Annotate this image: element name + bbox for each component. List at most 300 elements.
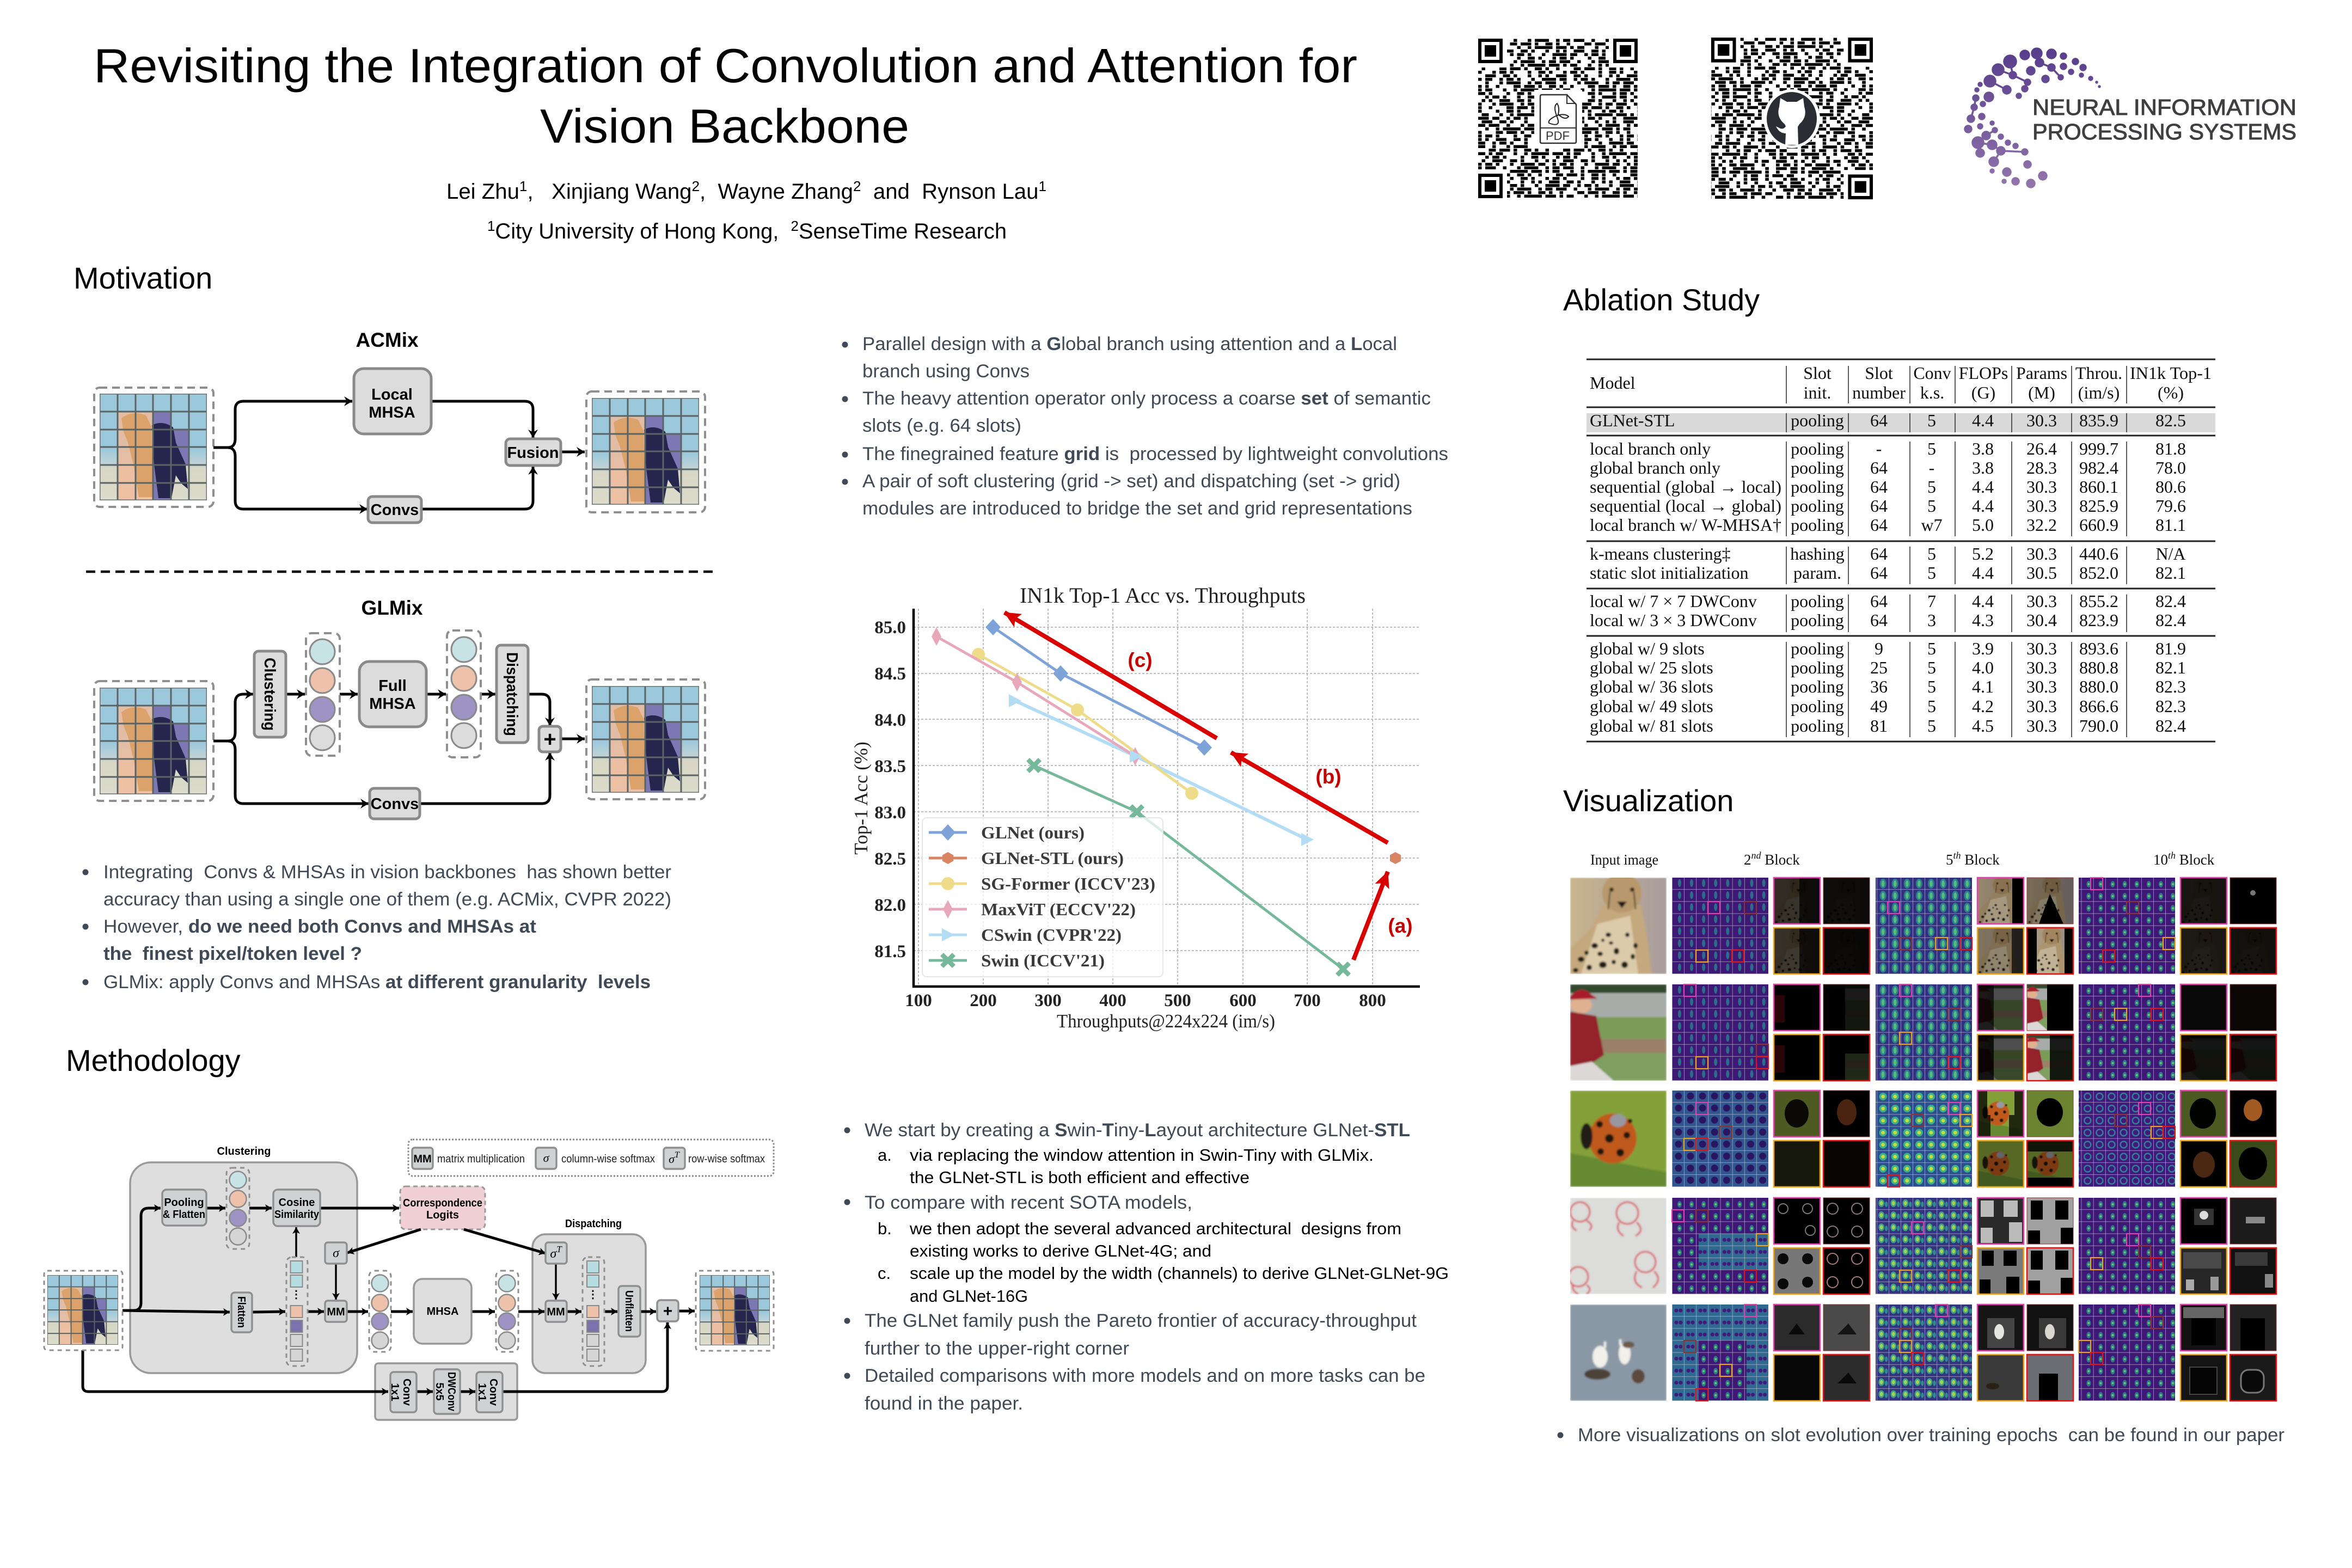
table header: (G) — [1971, 383, 1995, 402]
rows: conv kernel size: 3 — [1927, 610, 1936, 630]
CSwin marker — [1130, 750, 1142, 763]
rows: slot initialization: 30.3 — [2026, 544, 2057, 564]
panel: dispatching — [532, 1234, 646, 1373]
legend: MaxViT (ECCV'22) — [981, 899, 1136, 919]
rows: slot number: 5 — [1927, 696, 1936, 716]
row: cartoon cloth — [1569, 1198, 2276, 1294]
ACMix heading: ACMix — [356, 329, 419, 351]
rows: conv kernel size: 64 — [1870, 591, 1888, 611]
arrow: (a) — [1353, 872, 1388, 960]
rows: branch variants: 660.9 — [2079, 515, 2118, 535]
rows: conv kernel size: 64 — [1870, 610, 1888, 630]
text block: method description: existing works to derive GLNet-4G; and — [910, 1241, 1211, 1260]
text block: GLMix description: slots (e.g. 64 slots) — [862, 415, 1021, 436]
rows: branch variants: 5 — [1927, 439, 1936, 458]
rows: slot number: 4.0 — [1972, 658, 1994, 677]
sigma T — [546, 1242, 567, 1264]
rows: branch variants: 81.8 — [2155, 439, 2186, 458]
text block: method description: we then adopt the several advanced architectural designs from — [909, 1219, 1401, 1238]
series: MaxViT — [932, 627, 1140, 765]
rows: conv kernel size: local w/ 3 × 3 DWConv — [1590, 610, 1757, 630]
Conv 1x1: 1x1 — [389, 1383, 401, 1401]
Conv 1x1 — [476, 1372, 503, 1412]
row: GLNet-STL — [1590, 411, 2186, 430]
Local MHSA box: MHSA — [369, 404, 415, 421]
x tick labels: 600 — [1229, 991, 1257, 1010]
rows: slot initialization: N/A — [2155, 544, 2186, 564]
rows: slot number: 790.0 — [2079, 716, 2118, 736]
text block: method description: c. — [878, 1264, 891, 1283]
text block: method description: found in the paper. — [865, 1393, 1023, 1414]
y tick labels: 82.0 — [874, 896, 906, 915]
DWConv 5x5 — [433, 1369, 460, 1414]
rows: slot initialization: hashing — [1790, 544, 1845, 564]
y tick labels — [874, 618, 906, 961]
heading: Methodology: Methodology — [66, 1043, 241, 1077]
column headers: Block — [1761, 852, 1800, 868]
Fusion box: Fusion — [507, 444, 559, 462]
x tick labels — [905, 991, 1386, 1010]
rows: slot number: 30.3 — [2026, 639, 2057, 658]
authors: 2 — [692, 178, 700, 194]
rows: branch variants: - — [1876, 439, 1882, 458]
rows: branch variants: 79.6 — [2155, 496, 2186, 516]
rows: branch variants: 64 — [1870, 477, 1888, 497]
table header: Model — [1590, 373, 1636, 393]
text block: motivation bullets: Integrating Convs & MHSAs in vision backbones has shown better — [103, 862, 671, 883]
Conv 1x1 — [389, 1372, 416, 1412]
Correspondence Logits — [400, 1186, 485, 1229]
rows: slot number: 5 — [1927, 677, 1936, 696]
legend: T — [675, 1150, 680, 1160]
row: GLNet-STL: pooling — [1791, 411, 1844, 430]
rows: branch variants: 64 — [1870, 496, 1888, 516]
table: ablation study — [1587, 359, 2215, 742]
arrows — [83, 1208, 695, 1392]
rows: branch variants: 80.6 — [2155, 477, 2186, 497]
Convs box: Convs — [371, 795, 419, 813]
plus box — [539, 726, 561, 752]
Pooling & Flatten: & Flatten — [163, 1209, 205, 1221]
rows: conv kernel size: 30.4 — [2026, 610, 2057, 630]
row: GLNet-STL: 5 — [1927, 411, 1936, 430]
plus — [657, 1300, 678, 1321]
table header: IN1k Top-1 — [2130, 363, 2212, 383]
rows: slot number: 866.6 — [2079, 696, 2118, 716]
table header: Slot — [1803, 363, 1832, 383]
table header: Slot — [1865, 363, 1893, 383]
rows: branch variants: pooling — [1791, 439, 1844, 458]
rows: conv kernel size: pooling — [1791, 610, 1844, 630]
series: GLNet — [985, 619, 1212, 756]
table header: (%) — [2158, 383, 2184, 402]
panel: local branch — [375, 1363, 517, 1420]
Unflatten — [618, 1286, 640, 1337]
Dispatching label: Dispatching — [565, 1218, 622, 1230]
title: Vision Backbone — [540, 99, 909, 153]
rows: conv kernel size — [1590, 591, 2186, 630]
rows: branch variants: 3.8 — [1972, 458, 1994, 477]
rows: branch variants: 64 — [1870, 515, 1888, 535]
Clustering label: Clustering — [217, 1146, 271, 1157]
rows: slot number: 893.6 — [2079, 639, 2118, 658]
text block: method description: b. — [878, 1219, 892, 1238]
text block: GLMix description: The heavy attention operator only process a coarse set of semantic — [862, 388, 1431, 409]
rows: slot initialization: 64 — [1870, 563, 1888, 583]
authors: and Rynson Lau — [861, 180, 1038, 204]
rows: slot number: 30.3 — [2026, 677, 2057, 696]
y tick labels: 85.0 — [874, 618, 906, 638]
rows: slot number: 49 — [1870, 696, 1888, 716]
MHSA: MHSA — [427, 1306, 458, 1318]
input image — [44, 1271, 122, 1350]
rows: slot number: 880.8 — [2079, 658, 2118, 677]
MM — [325, 1301, 347, 1322]
chart: accuracy vs throughput — [850, 583, 1420, 1032]
logo wordmark: NEURAL INFORMATION — [2032, 95, 2296, 120]
axes — [914, 609, 1420, 987]
text block: method description: via replacing the window attention in Swin-Tiny with GLMix. — [910, 1146, 1374, 1165]
rows: branch variants: 4.4 — [1972, 477, 1994, 497]
output image — [696, 1271, 774, 1351]
Pooling & Flatten — [162, 1190, 206, 1226]
table header: Conv — [1913, 363, 1951, 383]
Unflatten: Unflatten — [623, 1290, 635, 1332]
text block: motivation bullets: GLMix: apply Convs and MHSAs at different granularity levels — [103, 972, 651, 993]
rows: branch variants: pooling — [1791, 496, 1844, 516]
rows: branch variants: 999.7 — [2079, 439, 2118, 458]
rows: conv kernel size: local w/ 7 × 7 DWConv — [1590, 591, 1757, 611]
rows: conv kernel size: 7 — [1927, 591, 1936, 611]
Flatten: Flatten — [235, 1296, 247, 1328]
column headers: 2 — [1744, 852, 1751, 868]
icon: dotted arc — [1965, 48, 2100, 187]
row: cheetah — [1570, 873, 2276, 974]
rows: slot number: 880.0 — [2079, 677, 2118, 696]
rows: slot initialization: 30.5 — [2026, 563, 2057, 583]
rows: slot number: 5 — [1927, 716, 1936, 736]
column headers: Block — [2176, 852, 2215, 868]
panel: ACMix diagram — [94, 329, 705, 523]
rows: slot number: 36 — [1870, 677, 1888, 696]
rows: branch variants: 64 — [1870, 458, 1888, 477]
rows: slot initialization: k-means clustering‡ — [1590, 544, 1731, 564]
rows: slot number: 82.1 — [2155, 658, 2186, 677]
chart title: IN1k Top-1 Acc vs. Throughputs — [1020, 583, 1306, 608]
panel: clustering — [130, 1162, 357, 1373]
rows: branch variants: 982.4 — [2079, 458, 2118, 477]
GLMix heading: GLMix — [361, 597, 423, 619]
MM: MM — [327, 1306, 345, 1318]
rows: slot number: global w/ 9 slots — [1590, 639, 1705, 658]
arrow: (b) — [1231, 752, 1388, 843]
rows: slot number: 9 — [1875, 639, 1883, 658]
rows: branch variants: sequential (global → local) — [1590, 477, 1781, 497]
table header: number — [1852, 383, 1906, 402]
y tick labels: 84.0 — [874, 710, 906, 730]
arrow: (c) — [1004, 612, 1217, 738]
rows: slot number: 82.3 — [2155, 677, 2186, 696]
rows: slot number: global w/ 36 slots — [1590, 677, 1713, 696]
affiliations: 2 — [791, 218, 799, 234]
y tick labels: 82.5 — [874, 849, 906, 869]
arrow labels: (a) — [1388, 915, 1413, 937]
legend: column-wise softmax — [561, 1153, 655, 1165]
Full MHSA box: Full — [378, 677, 407, 695]
row: GLNet-STL: 30.3 — [2026, 411, 2057, 430]
sigma T: T — [556, 1244, 562, 1254]
text block: motivation bullets: accuracy than using a single one of them (e.g. ACMix, CVPR 2022) — [103, 889, 671, 910]
QR code: PDF: PDF — [1546, 129, 1570, 143]
rows: slot number: 30.3 — [2026, 716, 2057, 736]
x tick labels: 800 — [1359, 991, 1386, 1010]
rows: slot initialization — [1590, 544, 2186, 583]
slot set — [447, 630, 481, 757]
rows: slot initialization: param. — [1793, 563, 1841, 583]
table header: Throu. — [2075, 363, 2122, 383]
authors: , Xinjiang Wang — [527, 180, 692, 204]
Pooling & Flatten: Pooling — [164, 1197, 204, 1209]
table header: k.s. — [1920, 383, 1944, 402]
x tick labels: 300 — [1034, 991, 1062, 1010]
text block: GLMix description: Parallel design with a Global branch using attention and a Local — [862, 334, 1397, 354]
column headers: th — [1953, 850, 1961, 861]
authors: 1 — [1038, 178, 1046, 194]
arrow labels: (c) — [1128, 649, 1153, 671]
text block: method description — [844, 1120, 1449, 1414]
table header: Params — [2016, 363, 2067, 383]
x tick labels: 500 — [1164, 991, 1191, 1010]
grid — [914, 609, 1420, 987]
rows: conv kernel size: 855.2 — [2079, 591, 2118, 611]
text block: method description: Detailed comparisons with more models and on more tasks can be — [865, 1365, 1425, 1386]
rows: branch variants: 5 — [1927, 496, 1936, 516]
y tick labels: 81.5 — [874, 942, 906, 961]
column headers: Block — [1961, 852, 2000, 868]
token stack: ⋮ — [587, 1289, 598, 1301]
logo wordmark — [2032, 95, 2296, 144]
rows: slot number: global w/ 49 slots — [1590, 696, 1713, 716]
x tick labels: 400 — [1099, 991, 1126, 1010]
row: GLNet-STL: 64 — [1870, 411, 1888, 430]
affiliations: SenseTime Research — [799, 219, 1007, 243]
authors: 2 — [853, 178, 861, 194]
rows: slot number: 4.2 — [1972, 696, 1994, 716]
Dispatching box — [497, 645, 528, 743]
logo: NeurIPS — [1965, 48, 2296, 187]
Full MHSA box — [359, 661, 426, 727]
column headers: Input image — [1590, 852, 1658, 868]
text block: motivation bullets: However, do we need both Convs and MHSAs at — [103, 916, 536, 937]
Correspondence Logits: Logits — [426, 1209, 459, 1221]
row: ladybug — [1570, 1091, 2276, 1187]
rows: branch variants: 5.0 — [1972, 515, 1994, 535]
rows: branch variants: 4.4 — [1972, 496, 1994, 516]
MHSA — [414, 1279, 471, 1344]
Clustering box — [254, 651, 286, 737]
rows: branch variants: pooling — [1791, 458, 1844, 477]
table header — [1590, 363, 2212, 402]
arrow labels — [1128, 649, 1413, 937]
DWConv 5x5: 5x5 — [433, 1382, 445, 1401]
rows: slot number: pooling — [1791, 658, 1844, 677]
QR code: PDF — [1478, 38, 1638, 199]
rows: conv kernel size: 4.4 — [1972, 591, 1994, 611]
title: Revisiting the Integration of Convolution and Attention for — [94, 39, 1357, 93]
sigma — [325, 1242, 347, 1264]
Conv 1x1: Conv — [487, 1379, 499, 1406]
rows: slot number: 81 — [1870, 716, 1888, 736]
series: Swin — [1026, 758, 1351, 977]
y tick labels: 84.5 — [874, 664, 906, 684]
Correspondence Logits: Correspondence — [403, 1197, 482, 1209]
title — [94, 39, 1357, 153]
rows: conv kernel size: 4.3 — [1972, 610, 1994, 630]
Full MHSA box: MHSA — [369, 695, 416, 713]
heading: Visualization: Visualization — [1563, 783, 1734, 818]
column headers: th — [2168, 850, 2176, 861]
column headers: 5 — [1946, 852, 1953, 868]
heading: Motivation: Motivation — [74, 261, 212, 295]
legend: matrix multiplication — [437, 1153, 525, 1165]
rows: slot number: 30.3 — [2026, 696, 2057, 716]
row: baseball player — [1570, 984, 2276, 1081]
legend: σ — [669, 1152, 675, 1166]
legend: GLNet (ours) — [981, 823, 1085, 842]
rows: slot number: pooling — [1791, 677, 1844, 696]
Flatten — [231, 1293, 252, 1332]
divider — [86, 571, 713, 573]
row: GLNet-STL: GLNet-STL — [1590, 411, 1675, 430]
Local MHSA box — [354, 369, 431, 434]
text block: GLMix description: branch using Convs — [862, 361, 1030, 382]
MM: MM — [547, 1306, 565, 1318]
rows: conv kernel size: 823.9 — [2079, 610, 2118, 630]
authors: , Wayne Zhang — [700, 180, 853, 204]
rows: conv kernel size: 30.3 — [2026, 591, 2057, 611]
Convs box — [370, 788, 420, 819]
rows: branch variants: pooling — [1791, 515, 1844, 535]
legend: σ — [543, 1151, 550, 1165]
rows: slot number: global w/ 25 slots — [1590, 658, 1713, 677]
text block: method description: further to the upper-right corner — [865, 1338, 1129, 1359]
text block: method description: scale up the model by the width (channels) to derive GLNet-GLNet-9G — [910, 1264, 1449, 1283]
rows: branch variants: 78.0 — [2155, 458, 2186, 477]
legend: Swin (ICCV'21) — [981, 951, 1105, 970]
legend: GLNet-STL (ours) — [981, 848, 1124, 868]
series: SG-Former — [972, 648, 1198, 800]
highlight row — [1587, 413, 2215, 432]
token stack: ⋮ — [291, 1289, 302, 1301]
rows: branch variants: 3.8 — [1972, 439, 1994, 458]
rows: slot initialization: 5.2 — [1972, 544, 1994, 564]
x tick labels: 700 — [1294, 991, 1321, 1010]
rows: slot number — [1590, 639, 2186, 736]
Convs box — [368, 497, 421, 523]
slots — [226, 1168, 249, 1249]
rows: slot number: pooling — [1791, 639, 1844, 658]
rows: branch variants — [1590, 439, 2186, 535]
row: GLNet-STL: 82.5 — [2155, 411, 2186, 430]
x tick labels: 100 — [905, 991, 932, 1010]
rows: slot number: global w/ 81 slots — [1590, 716, 1713, 736]
Local MHSA box: Local — [371, 386, 413, 403]
column headers: 10 — [2153, 852, 2168, 868]
rows: slot number: 3.9 — [1972, 639, 1994, 658]
text block: GLMix description: modules are introduced to bridge the set and grid representations — [862, 498, 1412, 519]
rows: slot number: 5 — [1927, 639, 1936, 658]
y tick labels: 83.0 — [874, 803, 906, 823]
rows: branch variants: w7 — [1921, 515, 1943, 535]
x axis label: Throughputs@224x224 (im/s) — [1057, 1010, 1275, 1032]
rows: branch variants: 26.4 — [2026, 439, 2057, 458]
rows: conv kernel size: 82.4 — [2155, 591, 2186, 611]
rows: branch variants: - — [1929, 458, 1934, 477]
x tick labels: 200 — [970, 991, 997, 1010]
legend — [408, 1140, 774, 1176]
table header: (im/s) — [2078, 383, 2120, 402]
rows: slot number: pooling — [1791, 716, 1844, 736]
DWConv 5x5: DWConv — [445, 1372, 457, 1412]
row: birds — [1570, 1304, 2276, 1401]
table header: init. — [1804, 383, 1831, 402]
rows: slot number: 5 — [1927, 658, 1936, 677]
legend: CSwin (CVPR'22) — [981, 925, 1122, 945]
text block: motivation bullets: the finest pixel/token level ? — [103, 944, 362, 964]
horizontal rules — [1587, 359, 2215, 742]
rows: branch variants: 81.1 — [2155, 515, 2186, 535]
rows: slot number: 25 — [1870, 658, 1888, 677]
plus: + — [663, 1302, 672, 1320]
QR code: GitHub — [1711, 37, 1873, 200]
text block: method description: the GLNet-STL is both efficient and effective — [910, 1168, 1250, 1187]
rows: branch variants: 5 — [1927, 477, 1936, 497]
text block: motivation bullets — [83, 862, 671, 993]
rows: conv kernel size: 82.4 — [2155, 610, 2186, 630]
input image — [94, 388, 213, 507]
arrow labels: (b) — [1315, 765, 1342, 788]
rows: branch variants: 825.9 — [2079, 496, 2118, 516]
rows: branch variants: 30.3 — [2026, 477, 2057, 497]
Conv 1x1: Conv — [401, 1379, 413, 1406]
output image — [586, 391, 705, 512]
y axis label: Top-1 Acc (%) — [850, 742, 872, 855]
rows: slot initialization: 440.6 — [2079, 544, 2118, 564]
legend: SG-Former (ICCV'23) — [981, 874, 1155, 893]
rows: branch variants: local branch w/ W-MHSA† — [1590, 515, 1781, 535]
text block: GLMix description: A pair of soft clustering (grid -> set) and dispatching (set -> grid) — [862, 471, 1400, 492]
output image — [586, 679, 705, 799]
panel: methodology diagram — [44, 1140, 774, 1420]
rows: slot initialization: 4.4 — [1972, 563, 1994, 583]
MM — [546, 1301, 567, 1322]
arrows — [213, 401, 585, 509]
rows: slot number: 4.5 — [1972, 716, 1994, 736]
legend — [922, 818, 1163, 977]
Convs box: Convs — [371, 501, 419, 519]
token stack — [583, 1257, 604, 1366]
Cosine Similarity: Cosine — [279, 1197, 315, 1209]
rows: slot initialization: 64 — [1870, 544, 1888, 564]
Conv 1x1: 1x1 — [476, 1383, 488, 1401]
table header: FLOPs — [1959, 363, 2008, 383]
sigma T: σ — [550, 1247, 556, 1261]
series: GLNet-STL — [1390, 852, 1401, 864]
arrows — [213, 694, 585, 804]
text block: visualization note: More visualizations on slot evolution over training epochs can be found in our paper — [1578, 1425, 2284, 1445]
text block: GLMix description: The finegrained feature grid is processed by lightweight convolutions — [862, 444, 1448, 464]
token stack — [286, 1257, 308, 1366]
